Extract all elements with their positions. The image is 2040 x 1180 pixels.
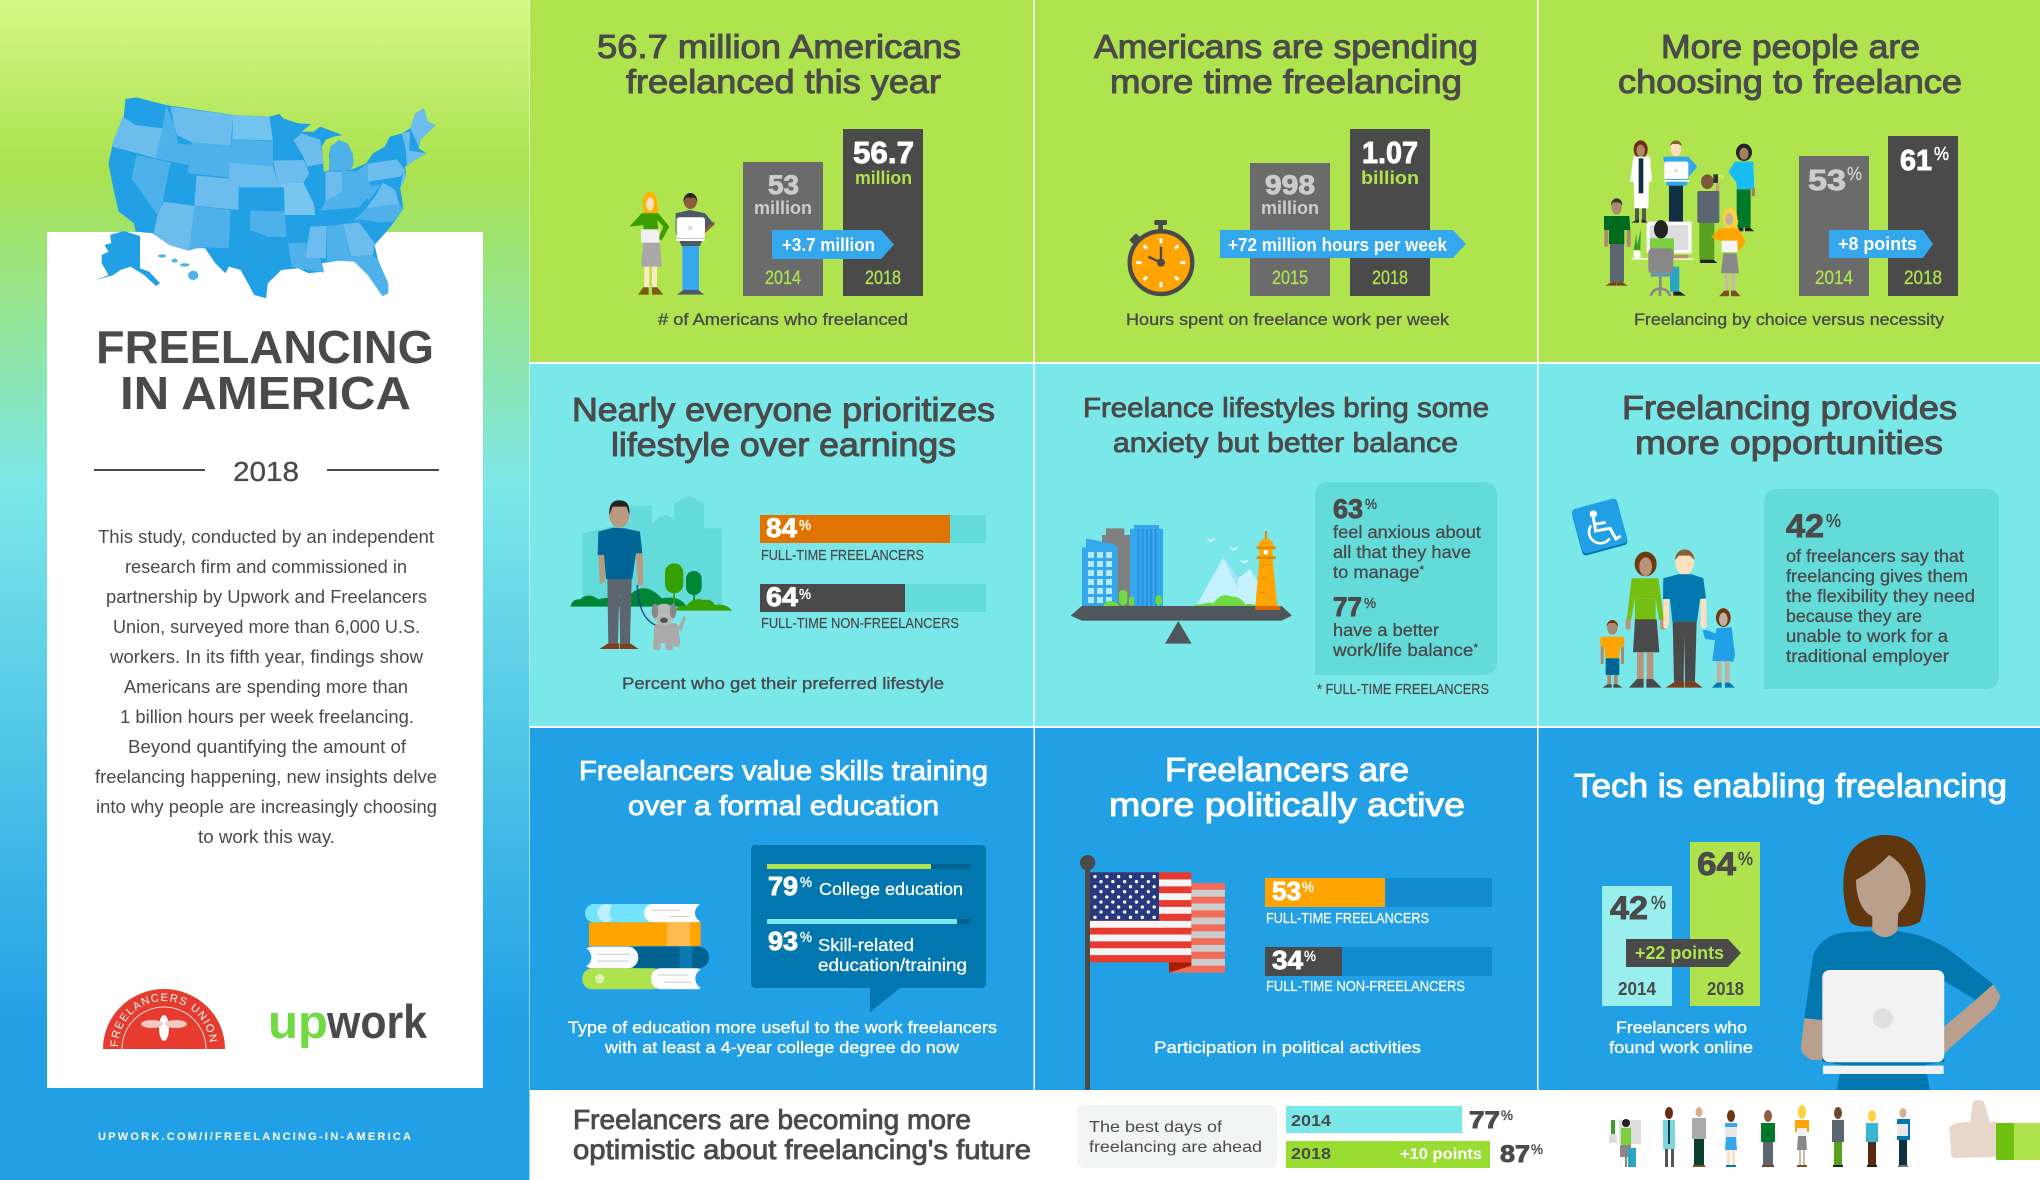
bar: full-time non-freelancers: 64 <box>766 582 798 612</box>
sidebar <box>0 0 530 1180</box>
arrow: +22 points <box>1626 939 1741 967</box>
heading: Freelance lifestyles bring some <box>1083 392 1489 423</box>
caption <box>568 1018 997 1057</box>
label box <box>1077 1105 1277 1168</box>
bar: 2018: % <box>1934 144 1949 164</box>
bar: 2014 <box>1602 886 1672 1006</box>
bar: 2018: 56.7 <box>853 135 914 170</box>
callout: 42% <box>1764 489 1999 689</box>
bar: 2015 <box>1250 163 1330 296</box>
bar: 2015: 2015 <box>1272 268 1308 289</box>
speech bubble: education stats: education/training <box>818 955 967 975</box>
bar: 2018 <box>843 129 923 296</box>
bar: 2018: 64 <box>1697 846 1736 882</box>
caption: Hours spent on freelance work per week <box>1126 310 1450 329</box>
icon: US map <box>96 97 436 298</box>
intro text: research firm and commissioned in <box>125 556 407 577</box>
heading <box>1109 751 1465 823</box>
icon: stack of books <box>571 904 717 989</box>
icon: accessibility sign <box>1571 498 1628 556</box>
bar: full-time non-freelancers: % <box>799 586 811 603</box>
bar: 2014: 2014 <box>765 268 801 289</box>
heading <box>1618 28 1962 100</box>
icon: woman with laptop <box>1801 835 2001 1090</box>
callout: stats box: to manage <box>1333 562 1416 582</box>
intro text: Beyond quantifying the amount of <box>128 736 407 757</box>
logo: Freelancers Union: FREELANCERS UNION <box>110 993 218 1046</box>
caption: Type of education more useful to the work freelancers <box>568 1018 997 1037</box>
intro text: partnership by Upwork and Freelancers <box>106 586 427 607</box>
logo: Upwork <box>268 995 428 1048</box>
bar: 2018: 87 <box>1500 1141 1530 1168</box>
heading <box>597 28 961 100</box>
bar: full-time freelancers: 84 <box>766 513 797 543</box>
heading: More people are <box>1661 28 1920 65</box>
title: FREELANCING <box>96 321 434 373</box>
bar: full-time non-freelancers: FULL-TIME NON-FREELANCERS <box>761 616 959 632</box>
caption: Participation in political activities <box>1154 1038 1421 1057</box>
bar: full-time non-freelancers: FULL-TIME NON-FREELANCERS <box>1266 979 1465 995</box>
bar: full-time non-freelancers: 34 <box>1272 945 1304 975</box>
callout: stats box: % <box>1364 595 1376 612</box>
bar: 2015: million <box>1261 198 1319 218</box>
heading <box>572 391 995 463</box>
heading <box>1083 392 1489 458</box>
callout: stats box: % <box>1365 496 1377 513</box>
bar: 2014: 2014 <box>1291 1113 1331 1130</box>
heading: Freelancers value skills training <box>579 755 988 786</box>
bar: 2018: % <box>1738 849 1753 869</box>
icon: row of freelancers <box>1609 1105 1910 1167</box>
intro text: 1 billion hours per week freelancing. <box>120 706 414 727</box>
bar: 2014: % <box>1847 164 1862 184</box>
icon: family <box>1600 549 1735 688</box>
arrow: +3.7 million <box>772 230 894 259</box>
heading: lifestyle over earnings <box>611 426 956 463</box>
bar: 2018: million <box>855 168 912 188</box>
intro text: Union, surveyed more than 6,000 U.S. <box>113 616 420 637</box>
bar: 2014 <box>743 162 823 296</box>
bar: 2018 <box>1350 129 1430 296</box>
caption: found work online <box>1609 1038 1753 1057</box>
heading: optimistic about freelancing's future <box>573 1134 1031 1165</box>
callout: stats box: 77 <box>1333 592 1362 622</box>
intro text: Americans are spending more than <box>124 676 408 697</box>
callout: stats box: all that they have <box>1333 542 1471 562</box>
arrow: +22 points: +22 points <box>1635 943 1724 963</box>
icon: group of freelancers <box>1604 140 1755 296</box>
heading: choosing to freelance <box>1618 63 1962 100</box>
callout: stats box: have a better <box>1333 620 1439 640</box>
bar: 2018 <box>1286 1141 1543 1168</box>
arrow: +3.7 million: +3.7 million <box>782 235 875 255</box>
bar: 2014: 42 <box>1610 890 1648 926</box>
icon: US flag <box>1080 855 1225 1090</box>
arrow: +72 million hours per week <box>1220 230 1466 258</box>
icon: man walking dog <box>571 496 732 650</box>
label box: freelancing are ahead <box>1089 1139 1262 1156</box>
caption: Freelancing by choice versus necessity <box>1634 310 1945 329</box>
callout: 42%: because they are <box>1786 606 1922 626</box>
footnote: * FULL-TIME FREELANCERS <box>1317 682 1489 698</box>
bar: full-time freelancers <box>1265 876 1492 927</box>
intro text <box>95 526 437 847</box>
bar: 2018: 61 <box>1900 145 1932 177</box>
white card <box>47 232 483 1088</box>
bar: 2018: 2018 <box>1372 268 1408 289</box>
bar: full-time freelancers: FULL-TIME FREELANCERS <box>761 548 924 564</box>
icon: two freelancers <box>629 192 715 295</box>
callout: 42%: traditional employer <box>1786 646 1949 666</box>
callout: 42%: freelancing gives them <box>1786 566 1968 586</box>
heading: more politically active <box>1109 786 1465 823</box>
bar: 2018 <box>1690 842 1760 1006</box>
caption: with at least a 4-year college degree do now <box>604 1038 960 1057</box>
speech bubble: education stats: % <box>800 929 812 946</box>
callout: stats box: feel anxious about <box>1333 522 1481 542</box>
panel: skills training <box>530 728 1034 1090</box>
callout: stats box <box>1315 482 1497 675</box>
url: UPWORK.COM/I/FREELANCING-IN-AMERICA <box>98 1131 411 1143</box>
bar: 2014: 2014 <box>1815 268 1853 289</box>
heading: freelanced this year <box>626 63 941 100</box>
bar: 2018: 2018 <box>1291 1146 1331 1163</box>
heading <box>1094 28 1478 100</box>
heading: Americans are spending <box>1094 28 1478 65</box>
bar: 2018: +10 points <box>1400 1146 1482 1163</box>
heading <box>573 1104 1031 1165</box>
caption <box>1609 1018 1753 1057</box>
bar: 2018: 2018 <box>1904 268 1942 289</box>
heading <box>1622 389 1957 461</box>
arrow: +8 points: +8 points <box>1838 234 1917 254</box>
callout: stats box: * <box>1473 642 1479 654</box>
callout: 42%: unable to work for a <box>1786 626 1948 646</box>
heading: anxiety but better balance <box>1113 427 1458 458</box>
callout: 42%: the flexibility they need <box>1786 586 1975 606</box>
bar: 2014 <box>1286 1106 1513 1134</box>
intro text: workers. In its fifth year, findings show <box>109 646 424 667</box>
icon: thumbs up <box>1949 1100 2040 1160</box>
speech bubble: education stats <box>751 845 986 1012</box>
heading <box>579 755 988 821</box>
bar: 2014: 2014 <box>1618 979 1656 999</box>
bar: 2014: 53 <box>1808 165 1846 197</box>
bar: full-time non-freelancers <box>1265 945 1492 995</box>
bar: full-time freelancers <box>760 513 986 564</box>
heading: Tech is enabling freelancing <box>1574 767 2007 804</box>
bar: 2015: 998 <box>1265 170 1315 200</box>
bar: full-time non-freelancers: % <box>1304 948 1316 965</box>
label box: The best days of <box>1089 1119 1223 1136</box>
callout: 42%: of freelancers say that <box>1786 546 1964 566</box>
panel: choosing to freelance <box>1538 0 2040 362</box>
bar: 2014: million <box>754 198 812 218</box>
caption: Percent who get their preferred lifestyle <box>622 674 944 693</box>
speech bubble: education stats: College education <box>819 879 963 899</box>
bottom strip: optimism <box>573 1100 2040 1168</box>
speech bubble: education stats: Skill-related <box>818 935 914 955</box>
bar: full-time freelancers: 53 <box>1272 876 1301 906</box>
bar: full-time freelancers: % <box>1302 879 1314 896</box>
callout: 42%: 42 <box>1786 508 1824 544</box>
bar: 2018 <box>1888 136 1958 296</box>
panel: more opportunities <box>1538 364 2040 726</box>
bar: 2014: % <box>1501 1107 1513 1123</box>
intro text: freelancing happening, new insights delve <box>95 766 437 787</box>
bar: 2018: 1.07 <box>1362 135 1418 170</box>
panel: anxiety but better balance <box>1035 364 1537 726</box>
heading: more opportunities <box>1635 424 1943 461</box>
intro text: into why people are increasingly choosing <box>96 796 437 817</box>
bar: 2014: 53 <box>768 170 799 200</box>
heading: Nearly everyone prioritizes <box>572 391 995 428</box>
bar: 2014: 77 <box>1469 1107 1500 1134</box>
bar: 2014 <box>1799 156 1869 296</box>
speech bubble: education stats: % <box>800 874 812 891</box>
intro text: to work this way. <box>198 826 335 847</box>
bar: 2018: % <box>1531 1141 1543 1157</box>
arrow: +8 points <box>1829 230 1933 258</box>
intro text: This study, conducted by an independent <box>98 526 434 547</box>
panel: lifestyle over earnings <box>530 364 1034 726</box>
panel: 56.7 million Americans <box>530 0 1034 362</box>
heading: 56.7 million Americans <box>597 28 961 65</box>
callout: stats box: work/life balance <box>1333 640 1463 660</box>
title: IN AMERICA <box>120 367 411 419</box>
heading: Freelancers are <box>1165 751 1409 788</box>
panel: politically active <box>1035 728 1537 1090</box>
heading: Freelancers are becoming more <box>573 1104 971 1135</box>
bar: 2014: % <box>1651 893 1666 913</box>
panel: tech enabling <box>1538 728 2040 1090</box>
logo: Upwork: work <box>326 995 428 1048</box>
bar: full-time non-freelancers <box>760 582 986 632</box>
bar: full-time freelancers: % <box>799 517 811 534</box>
speech bubble: education stats: 93 <box>768 926 798 956</box>
caption: # of Americans who freelanced <box>658 310 908 329</box>
heading: Freelancing provides <box>1622 389 1957 426</box>
bar: 2018: 2018 <box>1707 979 1744 999</box>
bar: 2018: 2018 <box>865 268 901 289</box>
heading: over a formal education <box>628 790 939 821</box>
logo: Upwork: up <box>268 995 328 1048</box>
caption: Freelancers who <box>1616 1018 1747 1037</box>
title <box>96 321 434 419</box>
bar: 2018: billion <box>1361 168 1419 188</box>
icon: stopwatch <box>1129 220 1192 294</box>
panel: more time freelancing <box>1035 0 1537 362</box>
callout: stats box: 63 <box>1333 494 1363 524</box>
icon: balance scale with city and nature <box>1071 525 1292 644</box>
year with rules: 2018 <box>233 456 299 487</box>
arrow: +72 million hours per week: +72 million hours per week <box>1228 235 1448 255</box>
heading: more time freelancing <box>1110 63 1462 100</box>
speech bubble: education stats: 79 <box>768 871 798 901</box>
callout: 42%: % <box>1826 511 1841 531</box>
callout: stats box: * <box>1420 564 1425 576</box>
bar: full-time freelancers: FULL-TIME FREELANCERS <box>1266 911 1429 927</box>
